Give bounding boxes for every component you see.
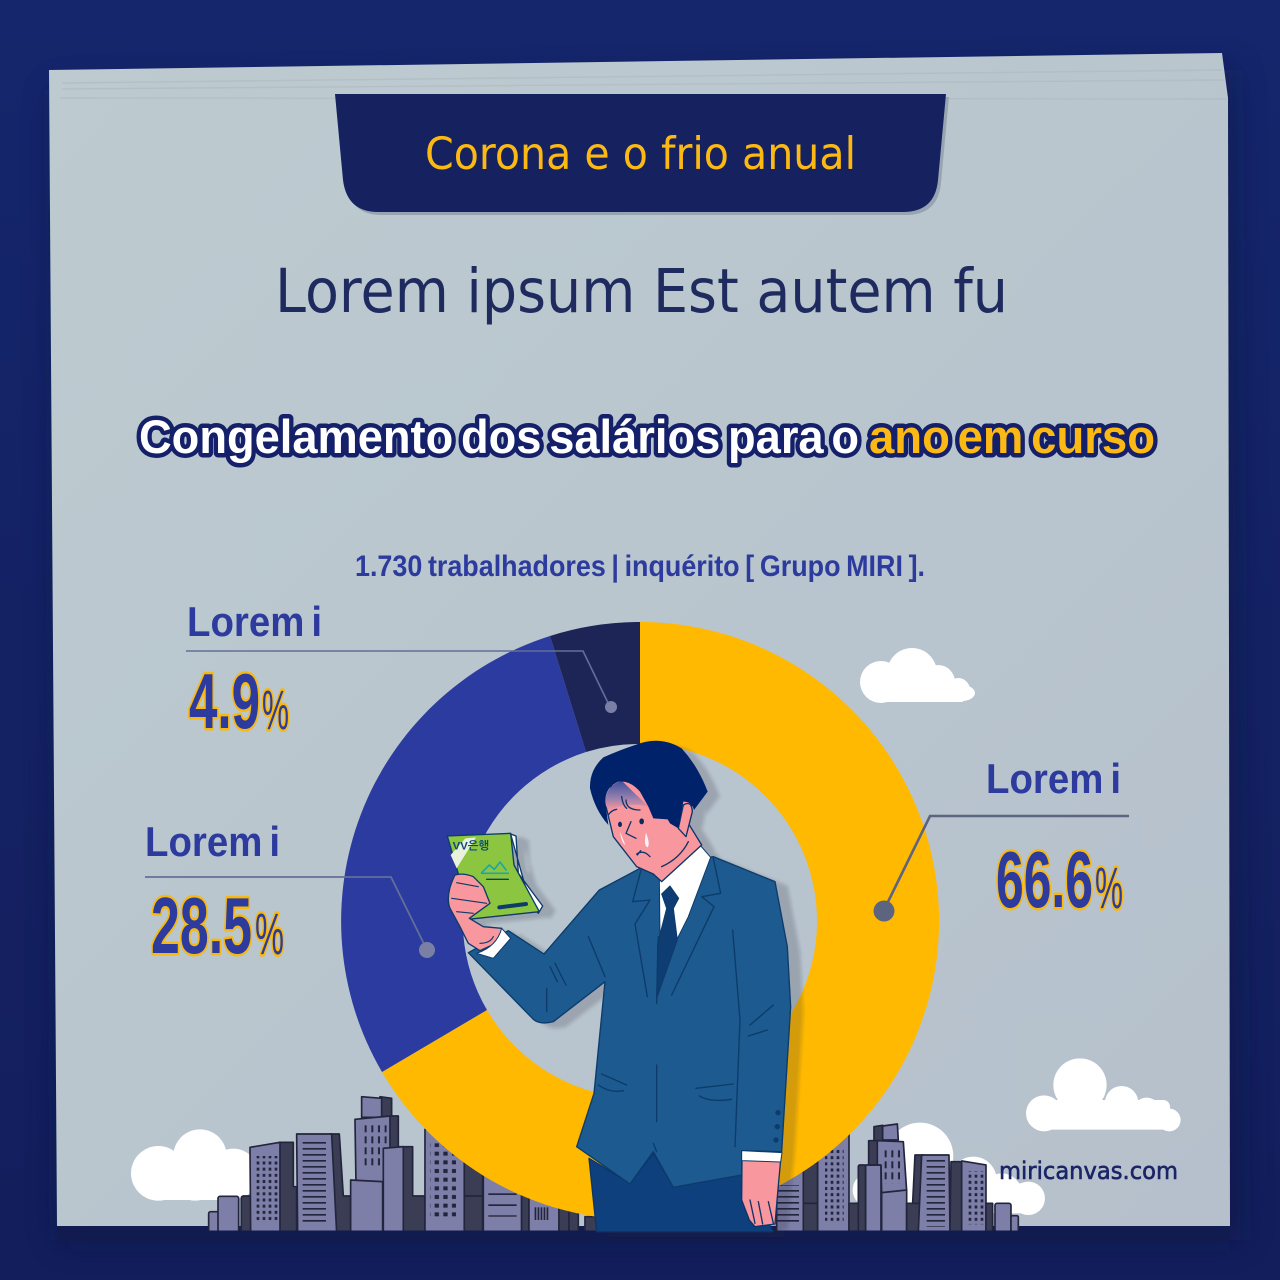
subheading: Congelamento dos salários para o xyxy=(139,410,859,463)
jacket xyxy=(468,857,791,1187)
brand wordmark: miricanvas.com xyxy=(999,1157,1178,1185)
bankbook pages xyxy=(511,834,543,913)
jacket details xyxy=(547,858,773,1152)
header ribbon xyxy=(335,94,949,215)
shirt cuff xyxy=(742,1151,782,1162)
bankbook label: VV은행 xyxy=(453,839,489,852)
callout 28.5%: % xyxy=(255,902,284,967)
callout 4.9%: 4.9 xyxy=(189,657,260,745)
upper cuff xyxy=(477,928,511,958)
tie xyxy=(657,886,679,998)
shirt xyxy=(659,845,711,943)
donut chart xyxy=(341,622,939,1220)
jacket buttons xyxy=(773,1110,781,1143)
trousers xyxy=(589,1153,773,1232)
segment: 66.6% xyxy=(382,622,939,1220)
callout 66.6% xyxy=(874,755,1129,924)
callout 66.6%: % xyxy=(1095,856,1123,921)
callout 4.9%: % xyxy=(262,678,289,741)
segment: 4.9% xyxy=(550,622,640,752)
callout 28.5%: 28.5 xyxy=(151,881,252,970)
facial features xyxy=(608,797,688,867)
forehead shade xyxy=(606,781,648,810)
bankbook bar xyxy=(499,904,526,907)
callout 66.6%: 66.6 xyxy=(996,835,1093,924)
cloud: bottom left xyxy=(131,1129,259,1201)
city skyline: left xyxy=(209,1097,598,1232)
callout 66.6%: Lorem i xyxy=(986,755,1121,802)
eyes xyxy=(618,818,644,827)
cloud: bottom right xyxy=(1026,1058,1181,1131)
city skyline: right xyxy=(777,1124,1018,1232)
callout 28.5%: Lorem i xyxy=(145,818,280,865)
bankbook xyxy=(447,833,539,919)
callout 28.5% xyxy=(145,818,435,970)
neck and face xyxy=(606,773,702,882)
hair xyxy=(590,741,708,828)
finger lines xyxy=(750,1200,773,1224)
ribbon title: Corona e o frio anual xyxy=(425,129,856,180)
subheading: ano em curso xyxy=(869,410,1155,463)
finger lines xyxy=(452,883,493,943)
callout 4.9% xyxy=(186,598,617,745)
ear xyxy=(678,803,692,837)
holding hand xyxy=(448,874,503,951)
bankbook logo xyxy=(482,862,508,879)
paper bottom edge band xyxy=(57,1226,1230,1240)
bankbook stripe xyxy=(451,837,476,868)
callout 4.9%: Lorem i xyxy=(187,598,322,645)
cloud: top right xyxy=(860,648,975,703)
illustration: worried man holding bankbook xyxy=(447,741,791,1232)
cloud: behind right city xyxy=(853,1123,1045,1215)
main heading: Lorem ipsum Est autem fu xyxy=(275,256,1008,327)
ground band xyxy=(57,1230,1230,1242)
segment: 28.5% xyxy=(341,636,586,1072)
survey caption: 1.730 trabalhadores | inquérito [ Grupo MIRI ]. xyxy=(355,550,925,583)
lower hand xyxy=(742,1158,781,1227)
tears xyxy=(620,832,649,847)
